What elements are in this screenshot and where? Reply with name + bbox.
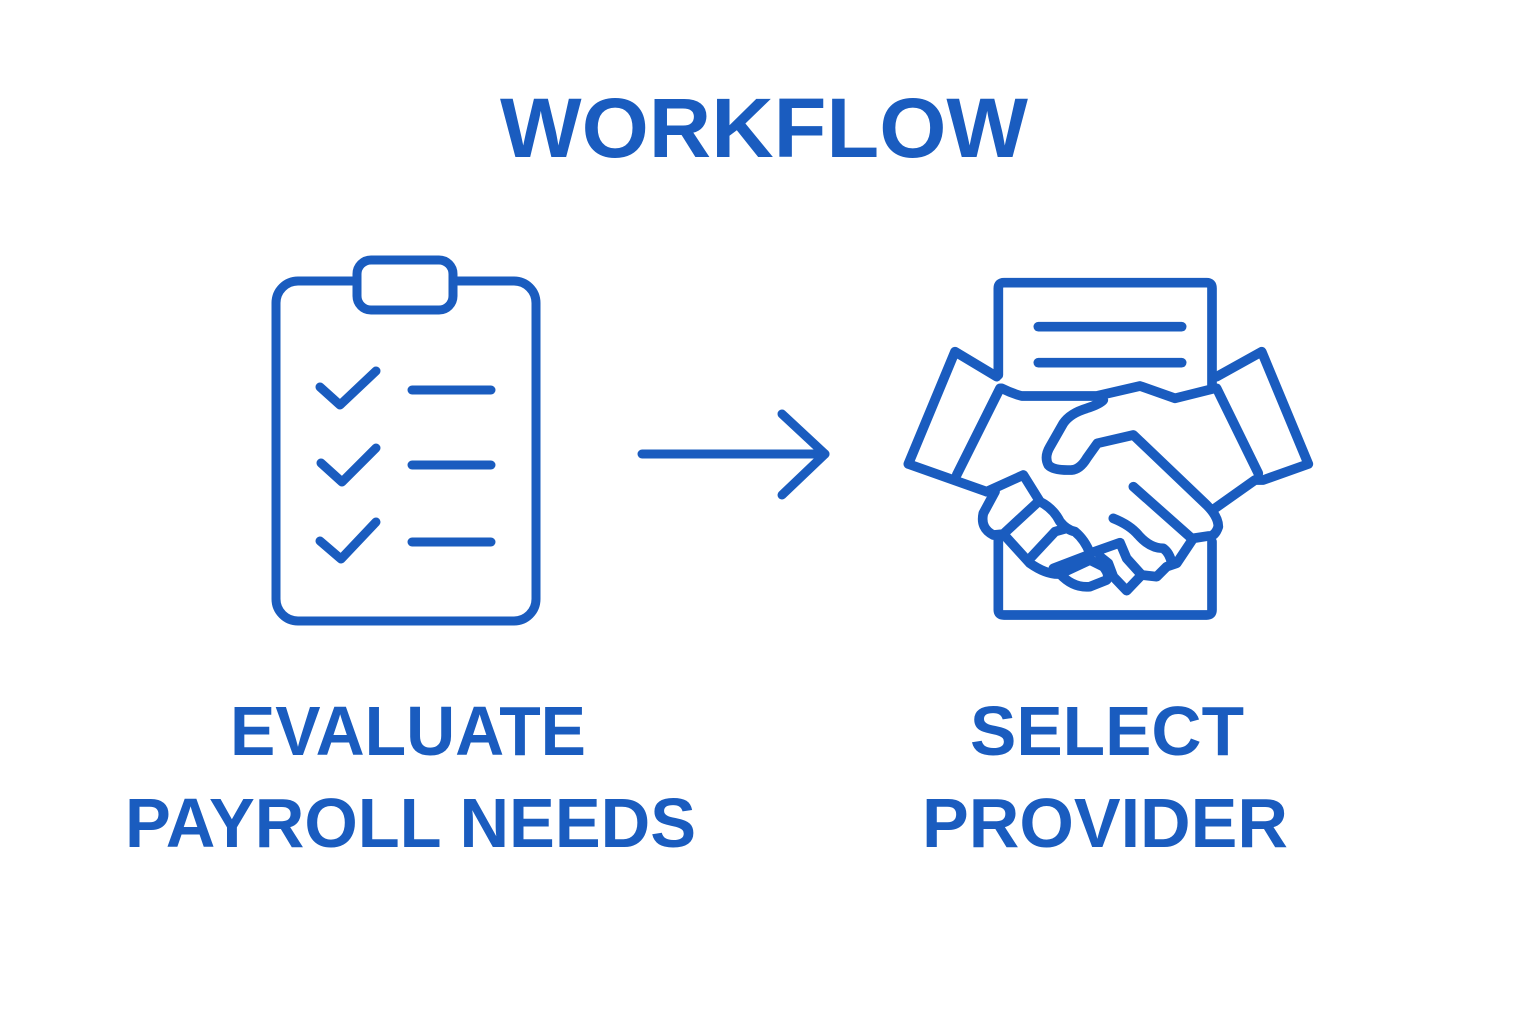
- label: select provider: PROVIDER: [922, 784, 1288, 862]
- label: select provider: [922, 692, 1288, 862]
- left hand: [987, 475, 1142, 575]
- label: evaluate payroll needs: [125, 692, 696, 862]
- label: select provider: SELECT: [970, 692, 1244, 770]
- right cuff: [1215, 352, 1308, 508]
- label: evaluate payroll needs: PAYROLL NEEDS: [125, 784, 696, 862]
- arrow: [642, 414, 825, 495]
- top edge of hands: [1002, 386, 1215, 398]
- document: [998, 283, 1212, 385]
- left cuff: [908, 352, 997, 492]
- icon: clipboard checklist: [276, 260, 536, 621]
- icon: handshake over document: [908, 283, 1308, 615]
- title: WORKFLOW: [500, 81, 1029, 175]
- label: evaluate payroll needs: EVALUATE: [230, 692, 586, 770]
- right hand: [1047, 400, 1218, 591]
